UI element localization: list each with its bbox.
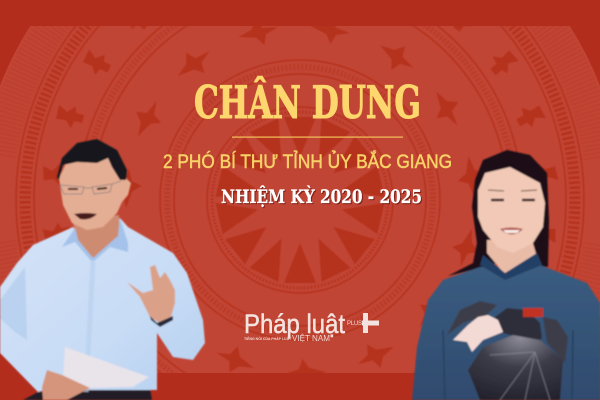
collar — [62, 218, 128, 262]
lotus flower — [453, 315, 503, 352]
sleeve seams — [443, 330, 573, 400]
title: CHÂN DUNG — [194, 76, 421, 129]
paper — [63, 347, 149, 388]
hand — [127, 265, 175, 323]
eyes and mouth — [491, 199, 535, 201]
lotus leaf large — [468, 335, 563, 400]
eyes — [68, 188, 107, 189]
mouth — [74, 213, 97, 219]
dress — [412, 265, 600, 400]
face — [59, 155, 131, 230]
shirt — [0, 218, 205, 392]
portrait: woman — [412, 150, 600, 400]
subtitle: 2 PHÓ BÍ THƯ TỈNH ỦY BẮC GIANG — [163, 151, 452, 173]
logo: Pháp luật Plus: Pháp luật — [244, 309, 345, 339]
portrait: man — [0, 139, 205, 400]
term text: NHIỆM KỲ 2020 - 2025 — [221, 185, 422, 208]
watch — [150, 316, 173, 327]
logo: Pháp luật Plus: TIẾNG NÓI CỦA PHÁP LUẬT — [244, 336, 292, 341]
trousers — [23, 388, 152, 400]
hair — [57, 139, 127, 180]
neck — [487, 240, 537, 277]
face — [478, 167, 545, 253]
lotus leaf left — [447, 301, 497, 335]
divider line — [232, 136, 403, 138]
flag badge — [523, 308, 543, 317]
lotus leaf middle — [495, 308, 542, 352]
collar — [480, 253, 542, 280]
glasses — [60, 181, 121, 194]
logo: Pháp luật Plus: PLUS — [347, 321, 362, 327]
logo: Pháp luật Plus: VIỆT NAM — [292, 334, 330, 343]
leaf ribs — [490, 352, 550, 400]
shirt shade — [0, 267, 27, 340]
neck — [73, 215, 120, 258]
placket — [86, 262, 93, 392]
lower hand — [42, 370, 90, 400]
lotus leaf right — [543, 317, 568, 363]
hair back — [448, 150, 549, 276]
